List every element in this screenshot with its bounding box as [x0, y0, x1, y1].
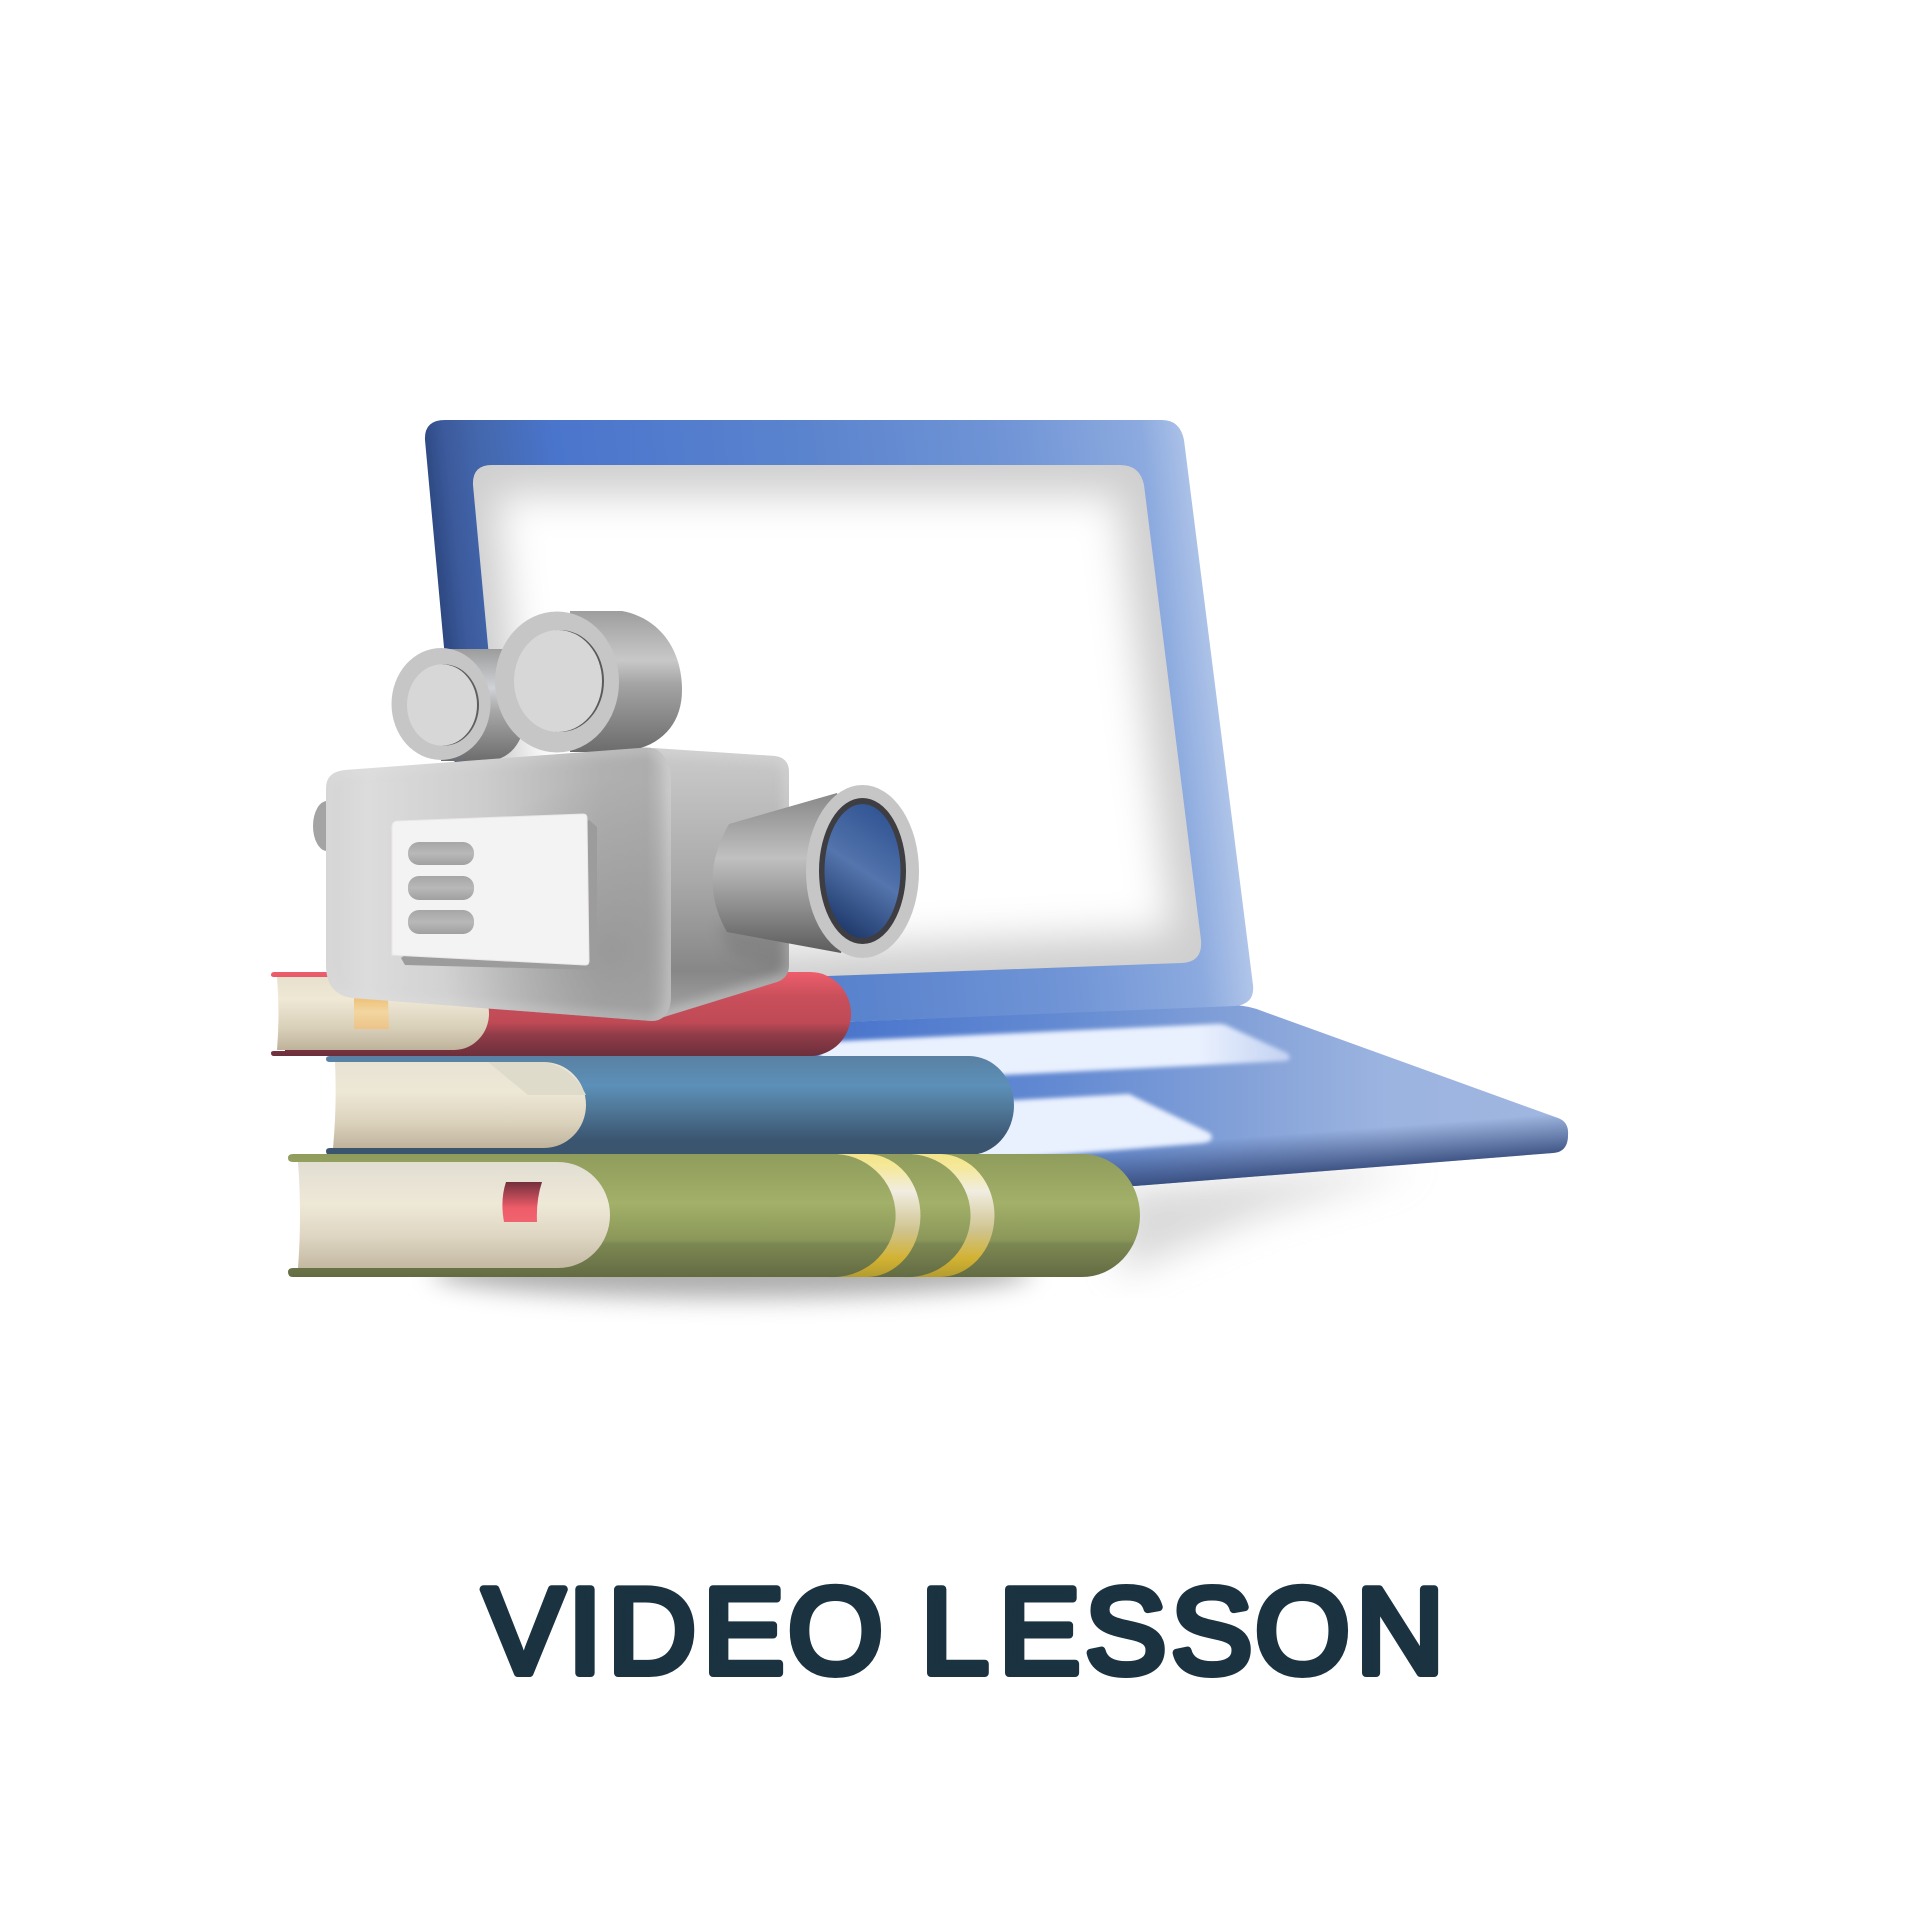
panel button bottom	[408, 910, 474, 934]
book stack	[271, 972, 1140, 1277]
book stack ground shadow	[426, 1277, 1038, 1313]
title: VIDEO LESSON	[483, 1563, 1444, 1699]
red book pages	[277, 977, 489, 1050]
red book	[271, 972, 851, 1056]
keyboard panel upper	[820, 1024, 1290, 1090]
laptop ground shadow	[1120, 1166, 1420, 1275]
panel button top	[408, 842, 474, 865]
laptop screen	[472, 465, 1202, 976]
gold band right	[904, 1154, 994, 1277]
lens glass	[824, 804, 900, 938]
laptop keyboard base	[800, 1005, 1568, 1186]
gold band left	[828, 1154, 920, 1277]
infographic canvas	[271, 420, 1568, 1678]
keyboard panel lower	[960, 1094, 1212, 1162]
rear knob	[313, 801, 341, 851]
green book	[288, 1154, 1140, 1277]
large film reel	[495, 611, 682, 752]
video camera	[313, 611, 919, 1030]
red bookmark	[502, 1182, 542, 1222]
control panel	[392, 814, 597, 970]
small film reel	[392, 648, 526, 761]
blue book	[326, 1056, 1014, 1155]
panel button middle	[408, 876, 474, 900]
laptop	[425, 420, 1568, 1186]
orange bookmark	[354, 998, 389, 1029]
green book pages	[298, 1162, 610, 1268]
camera side face	[653, 748, 789, 1018]
camera front face	[320, 740, 680, 1030]
laptop screen bezel	[425, 420, 1253, 1040]
camera lens	[712, 785, 919, 958]
